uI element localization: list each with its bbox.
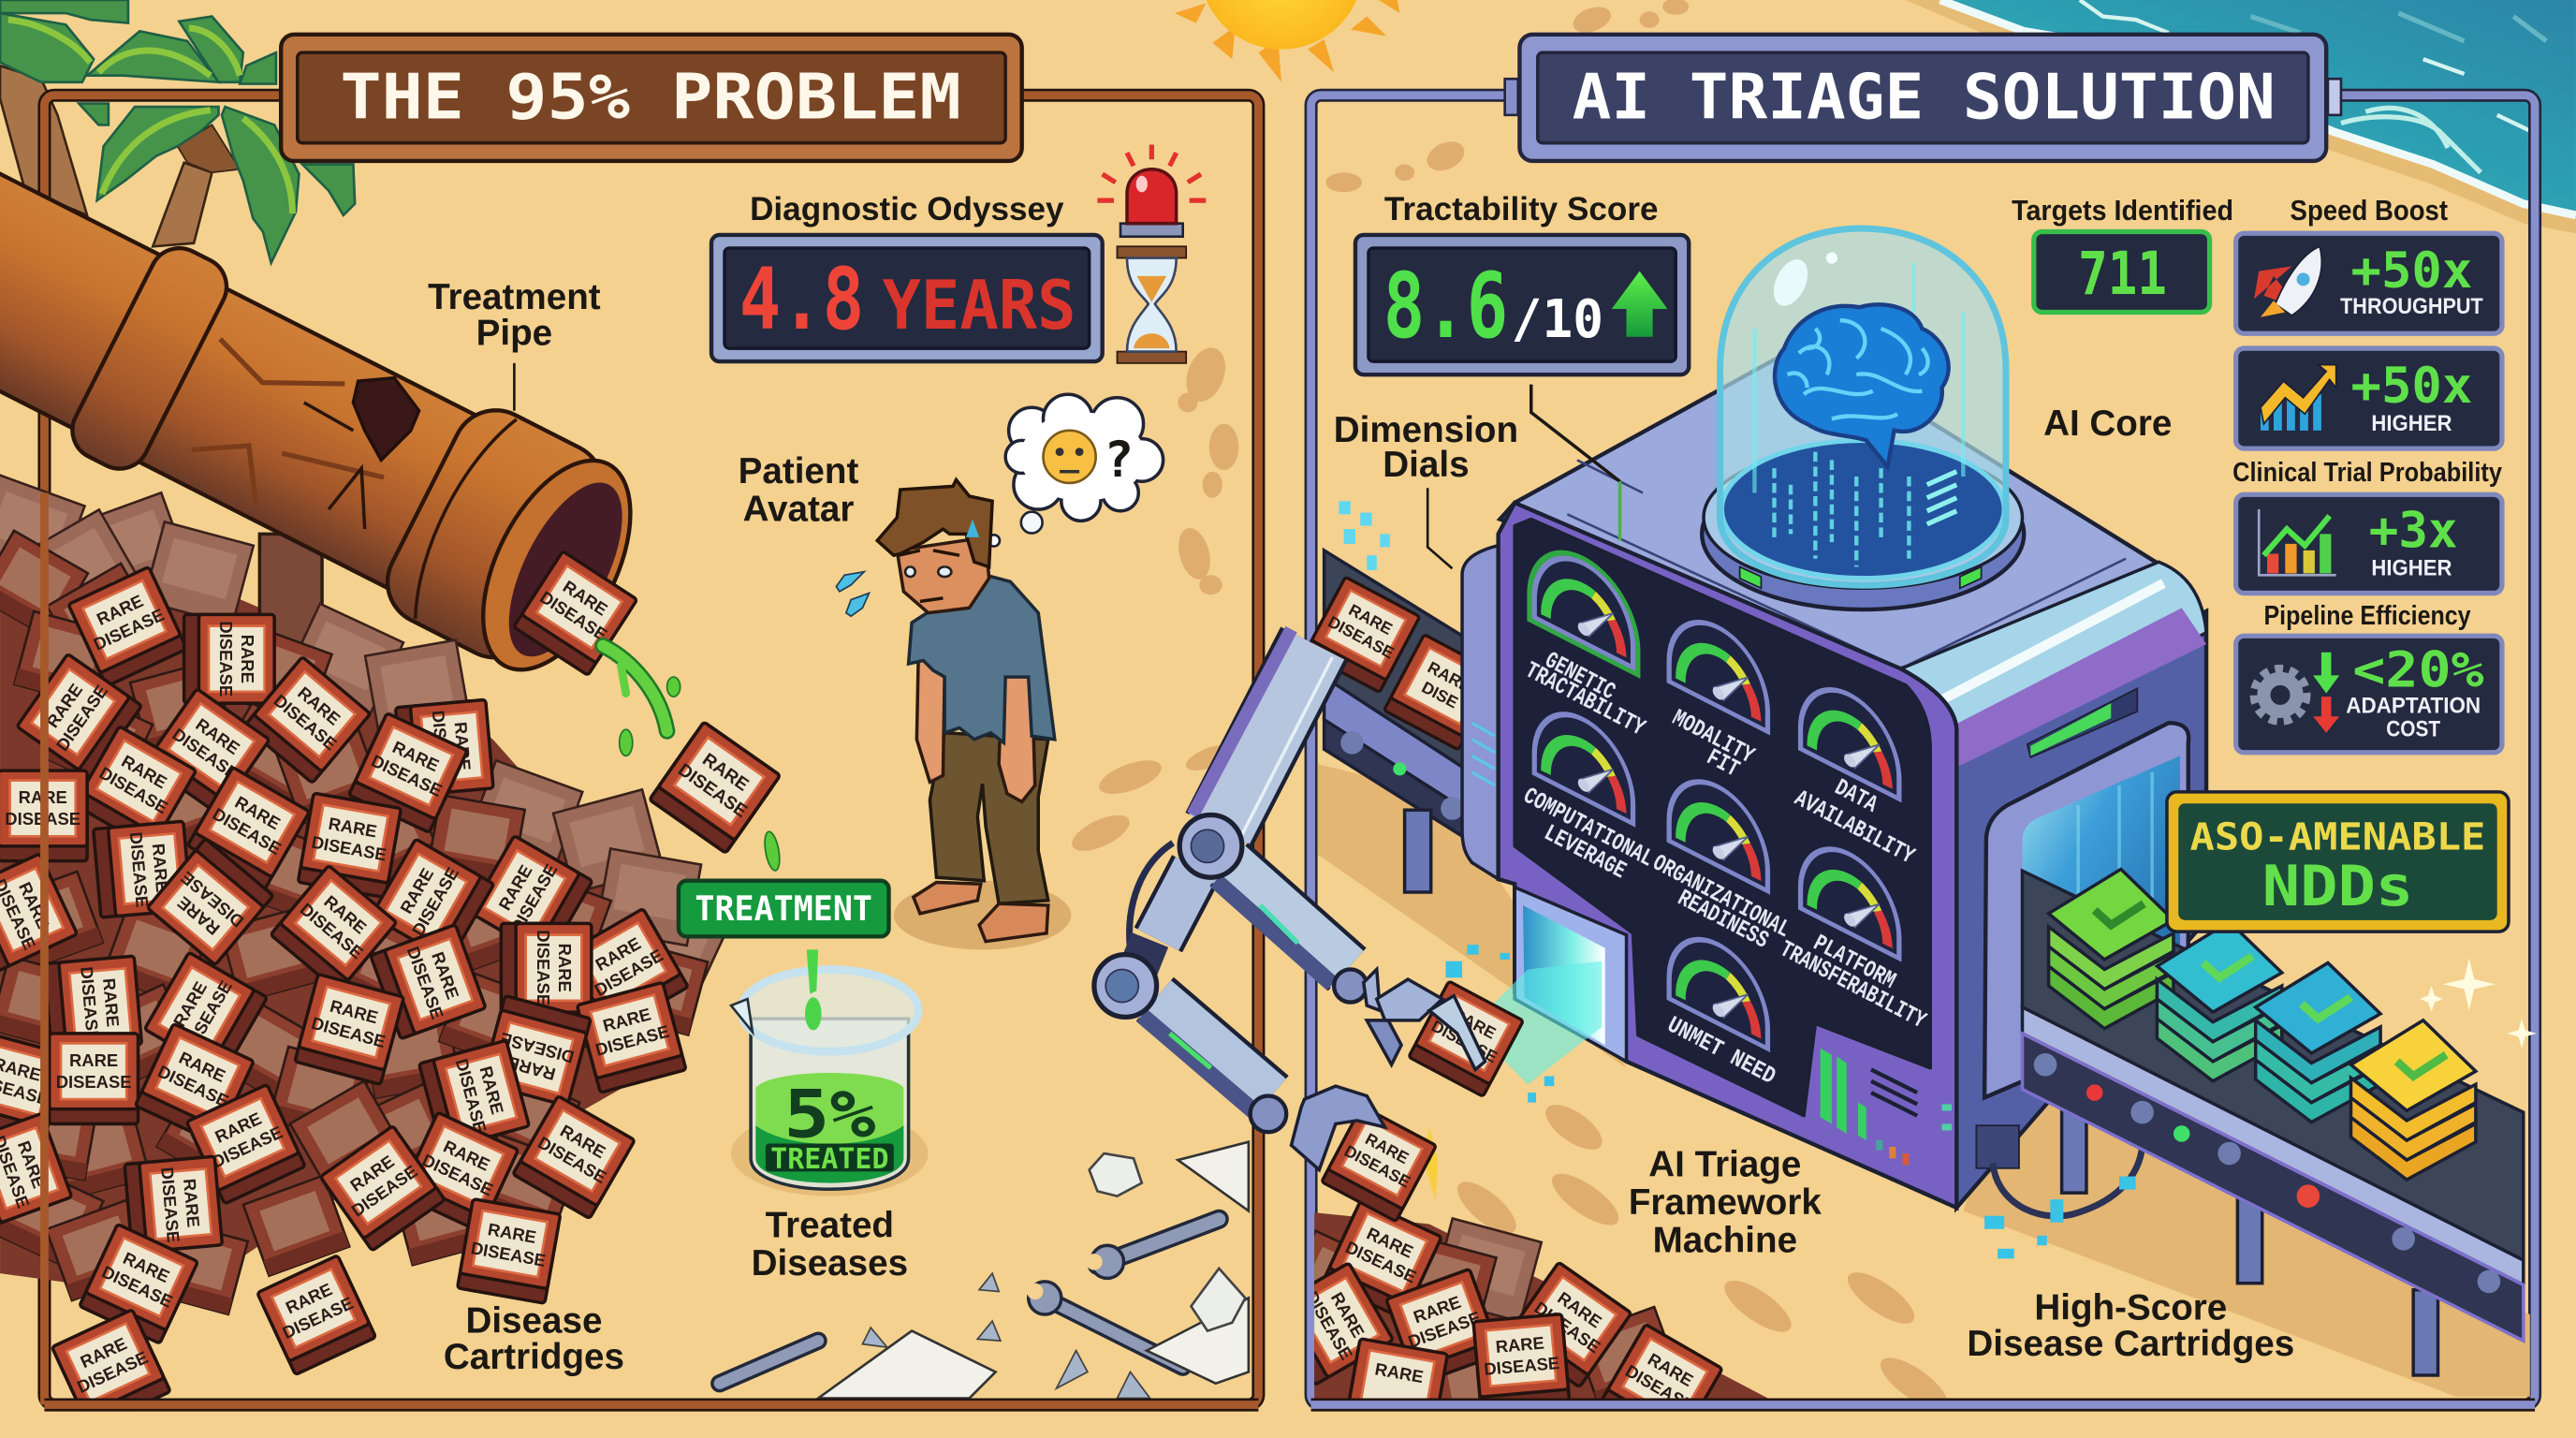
gauge: data availability: AVAILABILITY — [1790, 785, 1919, 871]
label: AI triage framework machine: AI Triage — [1648, 1145, 1801, 1185]
stack: gold — [2351, 1020, 2476, 1180]
machine front face — [1499, 503, 1956, 1208]
illustration: rare disease cartridge pile: RARE — [346, 1152, 398, 1196]
sparkles — [2420, 958, 2537, 1049]
pipe support post — [259, 534, 322, 674]
stat panel: higher (+50x): HIGHER — [2371, 412, 2452, 436]
label: disease cartridges — [444, 1300, 624, 1377]
right cartridge pile: RARE — [1327, 1288, 1368, 1341]
falling cartridge: DISEASE — [674, 759, 751, 822]
machine right face — [1956, 611, 2206, 1208]
illustration: input conveyor: RARE — [1346, 600, 1396, 638]
label: patient avatar: Avatar — [743, 489, 854, 529]
stat panel: adaptation cost — [2236, 636, 2502, 753]
illustration: rare disease cartridge pile: DISEASE — [77, 966, 103, 1043]
machine exit door — [1984, 723, 2188, 1097]
stat panel: adaptation cost: COST — [2386, 717, 2441, 741]
label: treated diseases: Treated — [766, 1206, 894, 1246]
illustration: rare disease cartridge pile: DISEASE — [534, 930, 553, 1005]
label: diagnostic odyssey: Diagnostic Odyssey — [750, 191, 1064, 227]
patient: torn shirt — [909, 575, 1055, 742]
panel header: the 95% problem: THE 95% PROBLEM — [340, 60, 961, 133]
illustration: input conveyor: DISE — [1419, 678, 1461, 712]
gauge: data availability — [1790, 670, 1919, 871]
gauge: genetic tractability: GENETIC — [1540, 647, 1619, 706]
right cartridge pile — [1314, 1202, 1767, 1399]
label: treatment pipe: Pipe — [476, 314, 552, 354]
illustration: rare disease cartridge pile: DISEASE — [506, 860, 561, 936]
stat panel: 4.8 years: 4.8 — [739, 249, 864, 349]
machine status strip — [2027, 688, 2137, 757]
icon: gear — [2254, 668, 2306, 721]
illustration: rare disease cartridge pile: RARE — [389, 737, 442, 775]
badge: treatment: TREATMENT — [695, 888, 872, 929]
right cartridge pile: DISEASE — [1484, 1353, 1560, 1379]
illustration: rare disease cartridge pile: RARE — [120, 1248, 173, 1286]
forearm upper — [1216, 864, 1347, 984]
stack: green — [2049, 869, 2174, 1029]
cover below frame bottom — [0, 1412, 2576, 1438]
illustration: rare disease cartridge pile: RARE — [294, 682, 344, 729]
illustration: rare disease cartridge pile: RARE — [428, 949, 463, 1002]
lower robot gripper — [1292, 1086, 1385, 1170]
stat panel: 711 targets: 711 — [2078, 239, 2167, 308]
machine corner highlight — [1901, 562, 2206, 766]
illustration: rare disease cartridge pile: DISEASE — [452, 1057, 490, 1135]
illustration: cartridge pile mass — [0, 501, 707, 1298]
illustration: input conveyor: RARE — [1425, 658, 1474, 696]
illustration: rare disease cartridge pile: RARE — [192, 714, 243, 758]
panel header: the 95% problem — [281, 35, 1022, 161]
gauge: platform transferability: PLATFORM — [1808, 930, 1900, 995]
right cartridge pile: RARE — [1364, 1224, 1416, 1262]
illustration: rare disease cartridge pile: RARE — [441, 1137, 493, 1175]
robot arm: segments, joints and cable — [1094, 629, 1367, 1132]
illustration: rare disease cartridge pile: RARE — [494, 861, 536, 914]
gauge: unmet need — [1662, 919, 1780, 1091]
illustration: rare disease cartridge pile: DISEASE — [534, 1132, 610, 1187]
cartridge held in lower gripper: DISEASE — [1341, 1141, 1413, 1192]
illustration: rare disease cartridge pile — [0, 475, 725, 1429]
illustration: scattered debris, wrenches and papers — [720, 1142, 1249, 1399]
right cartridge pile: DISEASE — [1530, 1298, 1604, 1357]
machine status bars and vents — [1821, 1049, 1952, 1165]
thought bubble: ? — [1104, 432, 1134, 489]
icon: hourglass — [1117, 246, 1186, 363]
illustration: rare disease cartridge pile: DISEASE — [419, 1150, 496, 1199]
stat panel: 4.8 years: YEARS — [883, 266, 1076, 345]
label: treatment pipe — [428, 277, 601, 411]
illustration: rare disease cartridge pile: DISEASE — [403, 944, 447, 1021]
icon: down arrows — [2313, 653, 2339, 694]
illustration: rare disease cartridge pile: RARE — [238, 635, 257, 683]
illustration: rare disease cartridge pile: DISEASE — [154, 1061, 232, 1111]
gauge: computational leverage: COMPUTATIONAL — [1518, 783, 1658, 873]
stat panel: higher (+50x) — [2236, 348, 2502, 448]
icon: rising chart — [2261, 365, 2336, 431]
stat panel: tractability score 8.6/10: /10 — [1512, 289, 1603, 350]
frame bottom edges over piles — [44, 1401, 2535, 1409]
gauge: organizational readiness: ORGANIZATIONAL — [1648, 849, 1794, 944]
scan beam from slot to cartridge — [1445, 945, 1602, 1103]
callout: ASO-amenable NDDs: ASO-AMENABLE — [2190, 814, 2485, 858]
gauge: computational leverage: LEVERAGE — [1539, 820, 1631, 885]
panel frame: AI triage solution — [1311, 95, 2535, 1405]
illustration: input conveyor — [1305, 501, 1499, 892]
illustration: rare disease cartridge pile: DISEASE — [310, 832, 388, 864]
illustration: rare disease cartridge pile: RARE — [14, 1138, 49, 1191]
right cartridge pile: DISEASE — [1342, 1237, 1419, 1286]
illustration: rare disease cartridge pile: DISEASE — [429, 710, 455, 786]
arm link segment — [1137, 868, 1196, 973]
callout: ASO-amenable NDDs: NDDs — [2262, 855, 2413, 919]
label: AI triage framework machine: Machine — [1653, 1220, 1797, 1260]
cartridge in pipe mouth: RARE — [560, 577, 611, 620]
arm upper shoulder segment — [1193, 629, 1332, 838]
illustration: rare disease cartridge pile: RARE — [505, 1053, 558, 1084]
illustration: output conveyor — [2022, 871, 2524, 1375]
machine left side box — [1462, 546, 1499, 879]
illustration: input conveyor: DISEASE — [1325, 612, 1398, 663]
label: tractability score: Tractability Score — [1384, 191, 1659, 227]
gauge: modality fit: MODALITY — [1667, 705, 1759, 770]
illustration: rare disease cartridge pile: RARE — [557, 1121, 609, 1162]
label: treated diseases — [752, 1206, 908, 1284]
label: disease cartridges: Cartridges — [444, 1337, 624, 1377]
stat panel: higher (+3x): +3x — [2369, 502, 2458, 559]
illustration: rare disease cartridge pile: DISEASE — [347, 1161, 421, 1221]
illustration: rare disease cartridge pile: DISEASE — [279, 1293, 357, 1343]
illustration: rare disease cartridge pile: DISEASE — [99, 1262, 176, 1312]
label: dimension dials: Dimension — [1334, 410, 1518, 450]
icon: beaker, 5% treated: 5% — [783, 1076, 875, 1152]
dome data disc — [1721, 440, 2004, 579]
illustration: rare disease cartridge pile: DISEASE — [369, 751, 446, 800]
illustration: rare disease cartridge pile: RARE — [327, 814, 378, 841]
stack: teal and blue — [2256, 962, 2380, 1123]
illustration: ground shadows of conveyors — [1318, 764, 2530, 1397]
icon: bar chart with green arrow — [2259, 509, 2336, 575]
illustration: rare disease cartridge pile: RARE — [396, 865, 437, 917]
gauge: computational leverage — [1518, 695, 1658, 885]
icon: brain — [1775, 304, 1949, 466]
illustration: rare disease cartridge pile: DISEASE — [310, 1013, 388, 1051]
illustration: rare disease cartridge pile: DISEASE — [157, 1167, 183, 1243]
pipe collar — [63, 238, 237, 478]
icon: red alarm light — [1097, 144, 1206, 237]
label: dimension dials: Dials — [1383, 445, 1470, 485]
spark under lower gripper — [1423, 1127, 1438, 1201]
icon: beaker, 5% treated: TREATED — [770, 1143, 889, 1176]
right cartridge pile: RARE — [1645, 1349, 1696, 1390]
label: dimension dials — [1334, 410, 1518, 568]
illustration: rare disease cartridge pile: DISEASE — [216, 621, 236, 697]
illustration: rare disease cartridge pile: DISEASE — [209, 1122, 285, 1172]
label: treated diseases: Diseases — [752, 1243, 908, 1284]
upper robot gripper — [1364, 969, 1486, 1070]
icon: rocket — [2254, 246, 2321, 317]
illustration: rare disease cartridge pile: RARE — [15, 879, 53, 932]
icon: worried face — [1044, 431, 1096, 483]
stat panel: adaptation cost: ADAPTATION — [2346, 695, 2481, 719]
label: pipeline efficiency: Pipeline Efficiency — [2263, 601, 2471, 631]
label: patient avatar — [739, 451, 859, 529]
patient: arms — [916, 657, 1035, 801]
gauge: modality fit: FIT — [1702, 744, 1744, 784]
panel header: AI triage solution — [1505, 35, 2341, 161]
illustration: rare disease cartridge pile: DISEASE — [56, 1072, 132, 1092]
right cartridge pile: RARE — [1495, 1332, 1545, 1357]
illustration: rare disease cartridge pile: DISEASE — [297, 899, 367, 962]
illustration: rare disease cartridge pile: RARE — [283, 1279, 335, 1317]
illustration: rare disease cartridge pile: RARE — [451, 721, 475, 771]
stat panel: higher (+50x): +50x — [2351, 358, 2472, 415]
illustration: rare disease cartridge pile: DISEASE — [181, 977, 236, 1052]
stat panel: throughput — [2236, 233, 2502, 333]
illustration: rare disease cartridge pile: RARE — [176, 1048, 228, 1086]
gauge: platform transferability — [1775, 829, 1931, 1035]
illustration: rare disease cartridge pile: DISEASE — [52, 682, 111, 755]
stat panel: 711 targets — [2034, 231, 2210, 312]
illustration: rare disease cartridge pile: DISEASE — [210, 803, 285, 858]
illustration: rare disease cartridge pile: DISEASE — [271, 690, 341, 754]
illustration: rare disease cartridge pile: DISEASE — [498, 1029, 576, 1067]
arm cable — [1130, 843, 1173, 949]
illustration: rare disease cartridge pile: RARE — [320, 891, 371, 938]
panel frame: the 95% problem — [44, 95, 1258, 1405]
illustration: rare disease cartridge pile: RARE — [169, 978, 211, 1030]
right cartridge pile: DISEASE — [1622, 1360, 1697, 1416]
label: AI core: AI Core — [2043, 404, 2172, 444]
background: ocean and shoreline — [1906, 0, 2576, 233]
cartridge held in upper gripper — [1409, 981, 1523, 1096]
forearm lower — [1142, 999, 1270, 1112]
stat panel: adaptation cost: <20% — [2352, 642, 2484, 699]
label: patient avatar: Patient — [739, 451, 859, 492]
cartridge in pipe mouth — [514, 551, 637, 675]
illustration: rare disease cartridge pile: DISEASE — [469, 1238, 548, 1270]
icon: up arrow — [1612, 271, 1667, 337]
dome base ring — [1702, 447, 2024, 609]
machine scanner slot — [1515, 888, 1627, 1062]
right cartridge pile: RARE — [1554, 1287, 1605, 1331]
illustration: rare disease cartridge pile: RARE — [149, 843, 172, 893]
illustration: rare disease cartridge pile: DISEASE — [591, 945, 666, 1000]
high-score cartridge stacks — [2049, 869, 2476, 1180]
illustration: rare disease cartridge pile: DISEASE — [74, 1347, 151, 1397]
illustration: rare disease cartridge pile: RARE — [601, 1004, 652, 1035]
cartridge held in upper gripper: DISEASE — [1428, 1017, 1500, 1066]
cartridge held in upper gripper: RARE — [1449, 1005, 1499, 1043]
illustration: rare disease cartridge pile: RARE — [212, 1108, 264, 1147]
label: high-score disease cartridges — [1967, 1287, 2294, 1364]
illustration: rare disease cartridge pile: RARE — [180, 1178, 204, 1228]
patient: head — [897, 537, 989, 613]
stack: teal — [2157, 922, 2282, 1081]
gauge: modality fit — [1667, 603, 1767, 784]
illustration: rare disease cartridge pile: RARE — [328, 996, 380, 1027]
illustration: rare disease cartridge pile: RARE — [232, 792, 284, 833]
frame segment over pile — [42, 493, 47, 1405]
icon: palm trees — [0, 0, 355, 263]
pipe mouth collar — [373, 396, 618, 672]
illustration: rare disease cartridge pile: DISEASE — [96, 763, 171, 817]
illustration: rare disease cartridge pile: RARE — [487, 1219, 538, 1247]
stat panel: 4.8 years — [711, 235, 1103, 361]
icon: sun — [1175, 0, 1399, 82]
stat panel: higher (+3x): HIGHER — [2371, 556, 2452, 580]
stat panel: throughput: +50x — [2351, 242, 2472, 300]
illustration: rare disease cartridge pile: RARE — [173, 893, 224, 939]
label: speed boost: Speed Boost — [2291, 194, 2448, 227]
illustration: rare disease cartridge pile: DISEASE — [169, 724, 242, 784]
illustration: rusted treatment pipe — [0, 136, 662, 695]
green treatment drip — [603, 646, 782, 872]
illustration: rare disease cartridge pile: RARE — [476, 1064, 507, 1116]
label: high-score disease cartridges: High-Score — [2034, 1287, 2227, 1328]
gauge: data availability: DATA — [1830, 774, 1882, 819]
icon: beaker, 5% treated — [731, 949, 929, 1196]
label: high-score disease cartridges: Disease Cartridges — [1967, 1324, 2294, 1364]
cartridge in pipe mouth: DISEASE — [536, 587, 611, 645]
patient: feet — [914, 882, 1048, 942]
stat panel: tractability score 8.6/10 — [1355, 235, 1689, 374]
stat panel: throughput: THROUGHPUT — [2340, 295, 2483, 319]
illustration: rare disease cartridge pile: RARE — [19, 787, 67, 807]
right cartridge pile: DISEASE — [1302, 1287, 1356, 1363]
panel header: AI triage solution: AI TRIAGE SOLUTION — [1573, 60, 2276, 133]
thought bubble — [988, 394, 1164, 547]
falling cartridge: RARE — [698, 749, 753, 796]
arm joints — [1094, 814, 1367, 1132]
illustration: rare disease cartridge pile: DISEASE — [593, 1021, 671, 1060]
footprints on sand — [122, 0, 1954, 1432]
illustration: rare disease cartridge pile: RARE — [42, 680, 86, 731]
right cartridge pile: DISEASE — [1405, 1307, 1484, 1352]
gauge: organizational readiness: READINESS — [1673, 885, 1773, 955]
patient: trousers — [929, 733, 1048, 903]
patient: hair — [877, 479, 992, 566]
illustration: AI core glass dome — [1702, 228, 2024, 609]
gauges: dimension dials — [1518, 534, 1931, 1091]
right cartridge pile: RARE — [1373, 1358, 1425, 1387]
right cartridge pile: RARE — [1411, 1292, 1463, 1327]
stat panel: tractability score 8.6/10: 8.6 — [1383, 253, 1508, 359]
label: AI triage framework machine: Framework — [1629, 1182, 1822, 1223]
machine control panel — [1515, 520, 1930, 1116]
gauge: genetic tractability: TRACTABILITY — [1520, 657, 1650, 742]
illustration: rare disease cartridge pile: DISEASE — [5, 809, 80, 829]
illustration: rare disease cartridge pile: DISEASE — [126, 831, 153, 908]
label: disease cartridges: Disease — [465, 1300, 602, 1341]
illustration: rare disease cartridge pile: DISEASE — [177, 868, 247, 932]
illustration: rare disease cartridge pile: RARE — [118, 751, 170, 792]
illustration: rare disease cartridge pile: RARE — [99, 977, 124, 1028]
illustration: rare disease cartridge pile: RARE — [77, 1333, 130, 1372]
illustration: AI triage framework machine — [1462, 344, 2206, 1258]
pipe crack hole — [353, 378, 419, 460]
gauge: organizational readiness — [1648, 762, 1794, 955]
illustration: rare disease cartridge pile: RARE — [69, 1050, 118, 1070]
gauge: unmet need: UNMET NEED — [1662, 1012, 1780, 1091]
illustration: patient avatar — [836, 479, 1071, 949]
machine top face — [1500, 344, 2176, 668]
label: treatment pipe: Treatment — [428, 277, 601, 317]
cartridge held in lower gripper: RARE — [1362, 1129, 1412, 1167]
illustration: rare disease cartridge pile: DISEASE — [91, 605, 168, 654]
machine cables — [1976, 1125, 2143, 1258]
label: AI triage framework machine — [1629, 1145, 1822, 1260]
illustration: rare disease cartridge pile: RARE — [555, 944, 575, 992]
label: targets identified: Targets Identified — [2012, 194, 2233, 227]
badge: treatment — [679, 881, 889, 936]
illustration: rare disease cartridge pile: DISEASE — [408, 864, 462, 939]
pipe mouth opening — [486, 466, 645, 673]
callout: ASO-amenable NDDs — [2167, 792, 2509, 932]
gauge: genetic tractability — [1520, 534, 1650, 742]
illustration: rare disease cartridge pile: RARE — [94, 591, 146, 629]
cartridge held in lower gripper — [1322, 1106, 1436, 1222]
gauge: platform transferability: TRANSFERABILITY — [1775, 936, 1931, 1035]
falling cartridge — [650, 722, 780, 853]
illustration: rare disease cartridge pile: RARE — [592, 933, 644, 975]
leader: tractability score — [1531, 385, 1620, 540]
stat panel: higher (+3x) — [2236, 494, 2502, 594]
label: clinical trial probability: Clinical Trial Probability — [2232, 458, 2502, 488]
